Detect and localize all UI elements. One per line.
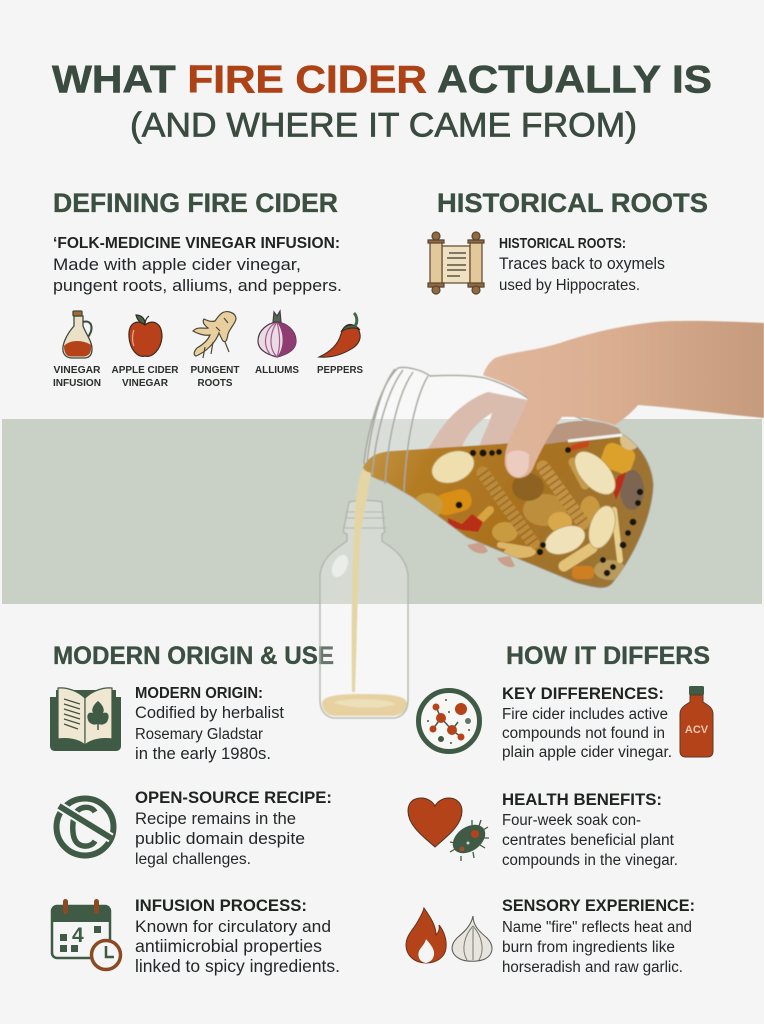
text block xyxy=(53,235,342,295)
text block: HISTORICAL ROOTS: xyxy=(499,235,626,252)
text block: modern origin: in the early 1980s. xyxy=(135,744,271,763)
heading: DEFINING FIRE CIDER xyxy=(53,188,338,218)
text block: open-source recipe xyxy=(135,788,332,868)
icon: open book xyxy=(50,688,121,751)
liquid stream xyxy=(352,470,371,692)
icon labels: PUNGENT xyxy=(190,364,240,376)
text block: infusion process xyxy=(135,896,340,976)
text block: infusion process: INFUSION PROCESS: xyxy=(135,896,307,915)
icon labels: INFUSION xyxy=(53,377,101,389)
icon: calendar and clock: 4 xyxy=(72,924,84,947)
icon: scroll xyxy=(428,232,484,294)
text block: health benefits: Four-week soak con- xyxy=(502,812,641,829)
text block: sensory experience xyxy=(502,897,695,976)
icon: no copyright xyxy=(56,798,114,856)
text block: health benefits xyxy=(502,791,678,869)
text block: open-source recipe: Recipe remains in the xyxy=(135,809,296,828)
text block: modern origin: Codified by herbalist xyxy=(135,703,284,722)
text block: modern origin: Rosemary Gladstar xyxy=(135,726,263,743)
panel: historical roots xyxy=(428,188,708,294)
text block: infusion process: Known for circulatory and xyxy=(135,917,331,936)
text block: sensory experience: SENSORY EXPERIENCE: xyxy=(502,897,695,915)
icon labels: VINEGAR xyxy=(54,364,101,376)
jar ingredients xyxy=(413,430,644,580)
text block: open-source recipe: legal challenges. xyxy=(135,851,251,868)
title xyxy=(52,58,712,145)
text block: modern origin: MODERN ORIGIN: xyxy=(135,685,263,702)
icon: vinegar infusion xyxy=(63,311,92,358)
icon: alliums xyxy=(258,311,296,357)
text block: sensory experience: burn from ingredients like xyxy=(502,939,675,956)
icon: flame and garlic xyxy=(406,908,492,963)
text block: used by Hippocrates. xyxy=(499,277,640,294)
text block: open-source recipe: public domain despite xyxy=(135,829,305,848)
icon: ACV bottle xyxy=(680,686,713,757)
text block xyxy=(499,235,665,294)
icon: apple xyxy=(129,315,162,356)
text block: Made with apple cider vinegar, xyxy=(53,255,301,274)
text block: key differences: KEY DIFFERENCES: xyxy=(502,685,664,703)
hand and arm xyxy=(483,321,764,478)
icon labels: ALLIUMS xyxy=(255,364,299,376)
text block: key differences: compounds not found in xyxy=(502,725,665,742)
panel: defining fire cider xyxy=(53,188,363,389)
jar glass xyxy=(364,367,653,587)
icon labels: VINEGAR xyxy=(122,377,168,389)
text block: key differences: Fire cider includes active xyxy=(502,706,668,723)
text block: health benefits: HEALTH BENEFITS: xyxy=(502,791,662,809)
thumbnail xyxy=(507,450,529,477)
photo: hand pouring jar into bottle xyxy=(320,321,764,718)
fingers behind glass xyxy=(421,392,528,567)
title: WHAT FIRE CIDER ACTUALLY IS xyxy=(52,58,712,102)
text block: health benefits: compounds in the vinegar. xyxy=(502,852,678,869)
text block: sensory experience: Name "fire" reflects heat and xyxy=(502,919,692,936)
sage band xyxy=(2,419,762,604)
heading: HISTORICAL ROOTS xyxy=(437,188,708,218)
icon labels: PEPPERS xyxy=(317,364,363,376)
text block: sensory experience: horseradish and raw garlic. xyxy=(502,959,683,976)
icon: calendar and clock xyxy=(52,899,120,970)
text block: ‘FOLK-MEDICINE VINEGAR INFUSION: xyxy=(53,235,340,252)
heading: HOW IT DIFFERS xyxy=(506,642,710,670)
text block: pungent roots, alliums, and peppers. xyxy=(53,276,342,295)
text block: health benefits: centrates beneficial plant xyxy=(502,832,675,849)
jar neck threads xyxy=(367,369,428,492)
icon labels: APPLE CIDER xyxy=(112,364,179,376)
icon labels: ROOTS xyxy=(198,377,232,389)
heading: MODERN ORIGIN & USE xyxy=(53,642,334,670)
icon: heart and microbe xyxy=(408,798,491,861)
text block: key differences: plain apple cider vinegar. xyxy=(502,744,672,761)
icon labels xyxy=(53,364,363,389)
text block: infusion process: linked to spicy ingredients. xyxy=(135,956,340,976)
text block: key differences xyxy=(502,685,672,761)
text block: infusion process: antiimicrobial properties xyxy=(135,936,322,956)
icon: peppers xyxy=(319,313,360,357)
panel: how it differs xyxy=(406,642,713,976)
title: (AND WHERE IT CAME FROM) xyxy=(130,107,637,145)
panel: modern origin and use xyxy=(50,642,340,976)
bottle xyxy=(320,500,408,718)
text block: modern origin xyxy=(135,685,284,763)
glass highlight xyxy=(568,435,622,441)
text block: Traces back to oxymels xyxy=(499,255,665,273)
palm through glass xyxy=(540,421,622,445)
icon: pungent roots xyxy=(193,312,236,358)
icon: petri dish xyxy=(418,690,480,752)
jar liquid xyxy=(363,433,653,587)
text block: open-source recipe: OPEN-SOURCE RECIPE: xyxy=(135,788,332,807)
icon: ACV bottle: ACV xyxy=(685,724,709,736)
